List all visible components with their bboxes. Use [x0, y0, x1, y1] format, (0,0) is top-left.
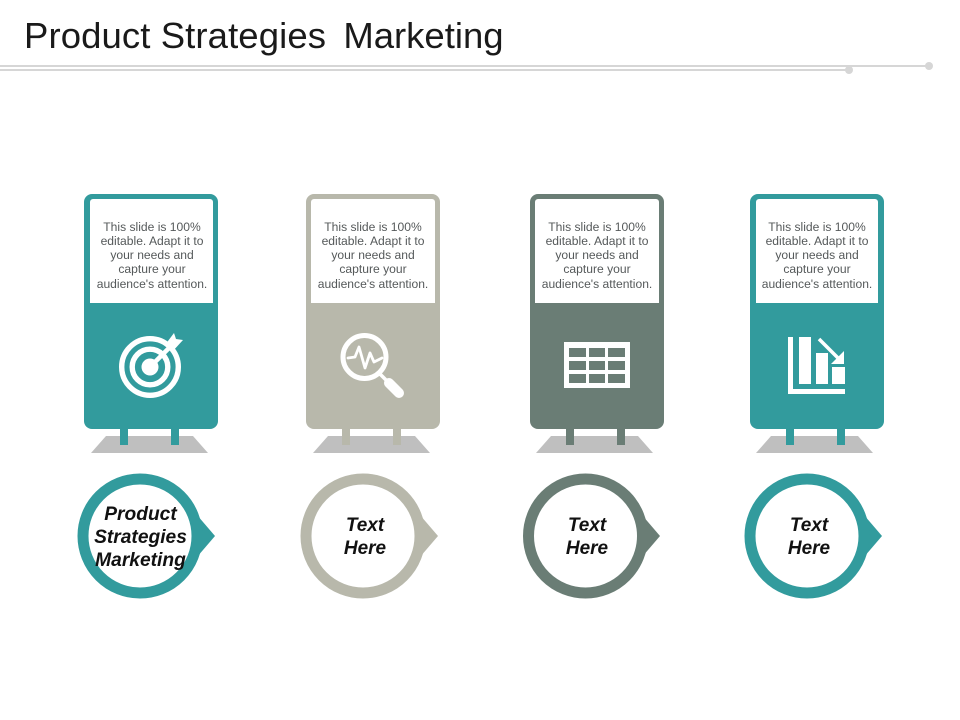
- text block 4: capture your: [783, 262, 851, 276]
- circle label 2: [344, 515, 386, 559]
- text block 3: capture your: [563, 262, 631, 276]
- panel: sign 1: [84, 194, 218, 453]
- text block 1: capture your: [118, 262, 186, 276]
- header rule: [0, 62, 933, 74]
- icon: target: [122, 333, 183, 395]
- text block 2: editable. Adapt it to: [322, 234, 424, 248]
- circle label 1: Product: [104, 504, 177, 525]
- circle label 1: [94, 504, 187, 571]
- circle label 4: [788, 515, 830, 559]
- text block 4: audience's attention.: [762, 276, 872, 290]
- panel: sign 2: [306, 194, 440, 453]
- icon: magnifier: [343, 336, 399, 393]
- text block 2: capture your: [339, 262, 407, 276]
- circle label 3: Here: [566, 538, 608, 559]
- title: Product Strategies Marketing: [24, 15, 504, 56]
- text block 1: audience's attention.: [97, 276, 207, 290]
- circle 3: [528, 479, 660, 593]
- circle 2: [306, 479, 438, 593]
- circle label 1: Marketing: [95, 550, 186, 571]
- circle label 2: Text: [346, 515, 384, 536]
- text block 2: This slide is 100%: [324, 220, 422, 234]
- icon: table: [564, 342, 630, 388]
- circle label 3: Text: [568, 515, 606, 536]
- text block 2: [318, 220, 428, 290]
- panel: sign 4: [750, 194, 884, 453]
- text block 3: This slide is 100%: [548, 220, 646, 234]
- circle label 3: [566, 515, 608, 559]
- text block 3: editable. Adapt it to: [546, 234, 648, 248]
- panel: sign 3: [530, 194, 664, 453]
- circle 1: [83, 479, 215, 593]
- icon: falling bar chart: [788, 337, 845, 394]
- circle label 1: Strategies: [94, 527, 187, 548]
- text block 4: [762, 220, 872, 290]
- circle 4: [750, 479, 882, 593]
- text block 4: This slide is 100%: [768, 220, 866, 234]
- text block 2: your needs and: [331, 248, 415, 262]
- text block 2: audience's attention.: [318, 276, 428, 290]
- text block 4: your needs and: [775, 248, 859, 262]
- text block 1: your needs and: [110, 248, 194, 262]
- text block 1: editable. Adapt it to: [101, 234, 203, 248]
- circle label 2: Here: [344, 538, 386, 559]
- text block 1: This slide is 100%: [103, 220, 201, 234]
- text block 3: [542, 220, 652, 290]
- text block 3: audience's attention.: [542, 276, 652, 290]
- circle label 4: Here: [788, 538, 830, 559]
- text block 1: [97, 220, 207, 290]
- text block 3: your needs and: [555, 248, 639, 262]
- text block 4: editable. Adapt it to: [766, 234, 868, 248]
- circle label 4: Text: [790, 515, 828, 536]
